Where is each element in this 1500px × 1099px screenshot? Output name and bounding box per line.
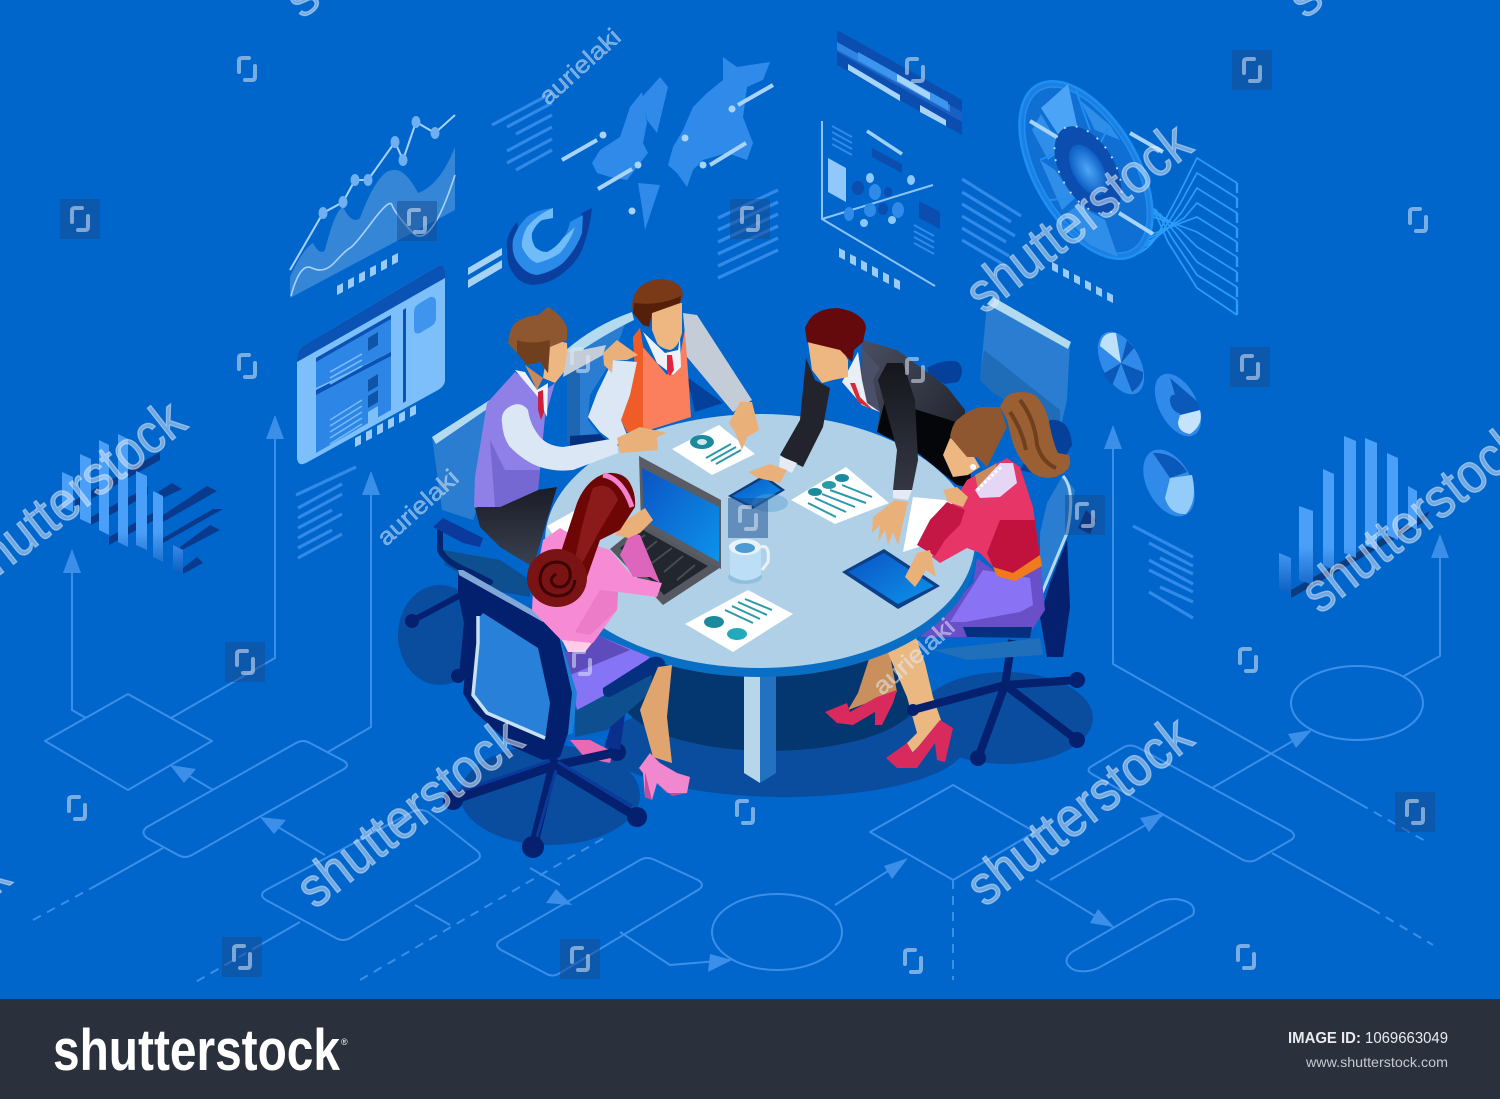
tablet 1 <box>728 475 788 512</box>
neck <box>975 463 997 490</box>
seat underside <box>933 638 1043 660</box>
text lines block: top center-left <box>492 93 552 170</box>
pink top <box>532 528 662 643</box>
neck <box>525 365 543 390</box>
chair: left man <box>405 398 530 683</box>
hair <box>508 307 567 373</box>
bar chart: right isometric <box>1279 436 1430 598</box>
hair head <box>950 407 1007 467</box>
collar <box>515 370 548 417</box>
chair base <box>913 640 1077 758</box>
hand on tablet <box>905 550 936 587</box>
aurielaki watermark center: aurielaki <box>868 613 960 700</box>
pink shoe <box>639 753 690 800</box>
shutterstock watermark bottom left: shutterstock <box>284 704 534 919</box>
bars <box>62 434 183 574</box>
hand on shoulder <box>603 340 638 373</box>
shirt <box>842 352 880 412</box>
chair base <box>453 752 637 847</box>
chair: right woman <box>907 475 1096 766</box>
back pink shoe <box>570 740 613 763</box>
wiring <box>1120 158 1237 315</box>
line chart widget <box>290 115 455 298</box>
cuff <box>779 456 797 473</box>
sleeve to shoulder <box>563 345 606 377</box>
headband <box>603 475 632 507</box>
right hand <box>872 500 908 545</box>
person: woman with pink top <box>527 473 690 800</box>
belt <box>993 555 1042 581</box>
website: www.shutterstock.com <box>1305 1054 1448 1070</box>
text lines block: center <box>718 190 778 278</box>
gantt bars widget <box>837 30 962 135</box>
collar <box>643 332 681 375</box>
person: man in purple vest, upper body <box>474 307 667 507</box>
collar <box>975 463 1017 498</box>
logo marks <box>60 50 1435 979</box>
left hand <box>748 464 787 483</box>
cuff right <box>893 490 912 500</box>
text lines blocks <box>296 93 1193 618</box>
chair: back right <box>927 297 1072 478</box>
table <box>544 414 976 677</box>
ponytail <box>1000 392 1070 478</box>
gray right sleeve <box>683 313 752 412</box>
back inner <box>472 613 550 740</box>
scatter chart widget <box>822 121 940 290</box>
earring <box>970 464 976 470</box>
aurielaki watermark left: aurielaki <box>372 464 464 551</box>
vest <box>621 328 691 432</box>
table leg <box>744 670 776 783</box>
arm <box>502 404 618 471</box>
back leg <box>848 645 897 710</box>
tie <box>538 390 544 420</box>
laptop <box>610 456 721 605</box>
arm support <box>605 700 627 750</box>
hair bun <box>527 549 587 607</box>
hand pointing <box>729 402 759 450</box>
seat underside <box>575 675 652 737</box>
back top edge <box>458 570 545 622</box>
flowchart background <box>33 415 1449 984</box>
skirt: right woman <box>920 558 1045 637</box>
tie <box>850 383 873 410</box>
chair: front <box>443 570 665 858</box>
leg <box>640 665 672 763</box>
armrest <box>603 657 665 697</box>
pie charts widget <box>1088 324 1211 525</box>
shutterstock watermark bottom right: shutterstock <box>954 702 1204 917</box>
footer logo: shutterstock <box>53 1018 341 1083</box>
aurielaki watermark top: aurielaki <box>534 23 626 110</box>
flowchart: left shapes <box>33 415 908 984</box>
radial gauge widget <box>992 59 1237 315</box>
paper 1 <box>672 425 755 475</box>
pie chart 1 <box>1088 324 1154 402</box>
waist <box>562 640 592 652</box>
bar chart: left isometric <box>62 434 223 574</box>
text lines block: upper right <box>962 179 1021 266</box>
back navy <box>1040 540 1070 657</box>
donut widget <box>468 208 592 288</box>
fan wedges <box>1032 84 1118 257</box>
face <box>543 338 568 383</box>
hand <box>615 508 653 538</box>
flowchart: right shapes <box>870 425 1449 980</box>
paper 4 <box>903 497 975 552</box>
face <box>652 303 682 350</box>
paper 3 <box>685 590 793 652</box>
registered mark: ® <box>341 1037 348 1047</box>
person: man in orange vest, arms <box>588 313 759 450</box>
world map widget <box>562 57 773 230</box>
paper 5 <box>547 511 590 545</box>
legs: right woman <box>825 635 953 768</box>
image id: IMAGE ID: 1069663049 <box>1288 1030 1448 1047</box>
face <box>943 438 980 477</box>
person: man in purple vest, trousers <box>475 487 557 567</box>
person: man in dark suit, upper body <box>748 308 918 545</box>
paper 2 <box>791 467 889 524</box>
shoe right <box>886 720 953 768</box>
vest <box>474 372 555 507</box>
shoe left <box>825 690 897 725</box>
seat <box>563 635 650 710</box>
hand <box>617 427 667 453</box>
white left sleeve <box>588 360 637 445</box>
person: man in orange vest, torso <box>621 279 691 432</box>
left sleeve <box>780 358 830 467</box>
chair: back of man in orange vest <box>566 312 723 448</box>
front leg <box>888 635 942 753</box>
mark corner <box>1078 510 1096 534</box>
dashboard window panel <box>297 265 445 464</box>
armrest: right woman chair <box>963 627 1032 638</box>
raised sleeve <box>620 533 660 583</box>
tie <box>667 355 674 376</box>
shutterstock watermark center right top: shutterstock <box>953 109 1203 324</box>
floor shadows <box>398 585 1093 845</box>
face <box>808 342 848 383</box>
right arm <box>878 363 918 490</box>
mug <box>728 539 768 584</box>
hair <box>553 473 635 600</box>
footer bar <box>0 999 1500 1099</box>
back outer <box>458 570 572 760</box>
hair <box>632 279 683 327</box>
chair base <box>412 590 470 676</box>
pie chart 3 <box>1133 441 1205 525</box>
hair <box>805 308 866 362</box>
text lines block: lower left <box>296 467 356 558</box>
lapel <box>862 348 880 412</box>
back panel <box>1040 475 1075 587</box>
person: woman with ponytail, upper body <box>905 392 1070 587</box>
back strip <box>545 618 577 735</box>
hand at chest <box>943 487 968 507</box>
dark stripes <box>75 452 223 574</box>
text lines block: lower right <box>1133 526 1193 618</box>
person: man in suit, torso <box>860 340 972 488</box>
tablet 2 <box>842 549 940 609</box>
raised forearm <box>917 502 965 556</box>
jacket body <box>932 458 1040 573</box>
pie chart 2 <box>1145 366 1211 444</box>
